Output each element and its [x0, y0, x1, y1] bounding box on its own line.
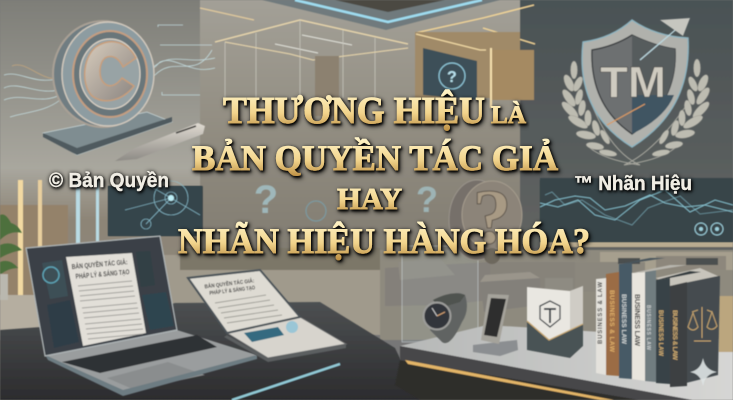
label: copyright: © Bản Quyền [49, 170, 169, 192]
product box with T logo [527, 286, 583, 358]
display shelf [395, 296, 733, 400]
book spine titles [598, 282, 678, 361]
laptop [26, 236, 257, 396]
big metallic question mark coin [449, 173, 522, 264]
title line 4: NHÃN HIỆU HÀNG HÓA? [178, 221, 590, 261]
main title [178, 90, 590, 261]
tablet document title: BẢN QUYỀN TÁC GIẢ: [204, 277, 255, 290]
copyright symbol on glass base [4, 21, 215, 155]
laptop document title [71, 256, 130, 281]
wall screen with network graphic and question marks [108, 178, 438, 236]
arrow rising across shield [607, 18, 690, 125]
title line 1: LÀ [491, 101, 526, 129]
row of law books [596, 258, 720, 387]
title line 2: BẢN QUYỀN TÁC GIẢ [192, 138, 558, 178]
data visualization wall panel right [540, 178, 733, 242]
smartphone on charger [473, 294, 518, 356]
icon: sparkle [690, 358, 717, 386]
shield with TM and laurel wreath [559, 18, 712, 165]
dark desk [0, 302, 420, 400]
background: modern office interior: ? [447, 69, 457, 86]
book spine titles: BUSINESS & LAW [598, 282, 604, 344]
icon: pen [115, 123, 205, 161]
icon: scales of justice [688, 307, 717, 341]
ambient room details [385, 258, 540, 312]
tablet document title [204, 277, 256, 297]
wall screen with network graphic and question marks: ? [254, 178, 278, 222]
big metallic question mark coin: ? [472, 173, 512, 260]
shield with TM and laurel wreath: TM [600, 58, 666, 107]
wave lines around copyright [4, 25, 215, 117]
book spine titles: BUSINESS & LAW [671, 310, 678, 361]
wall screen with network graphic and question marks: ? [416, 179, 438, 220]
label: trademark: ™ Nhãn Hiệu [574, 173, 692, 195]
laptop document title: BẢN QUYỀN TÁC GIẢ: [71, 256, 128, 271]
book spine titles: BUSINESS LAW [620, 294, 627, 345]
icon: plant [0, 214, 22, 300]
laurel wreath [559, 59, 712, 165]
laptop document title: PHÁP LÝ & SÁNG TẠO [75, 267, 130, 281]
foldable tablet [188, 270, 346, 362]
glass display case [402, 246, 478, 342]
tablet document title: PHÁP LÝ & SÁNG TẠO [209, 284, 256, 297]
book spine titles: BUSINESS & LAW [608, 290, 615, 353]
title line 3: HAY [337, 181, 402, 216]
book spine titles: BUSINESS LAW [633, 294, 640, 346]
title line 1: THƯƠNG HIỆU [223, 90, 485, 132]
book spine titles: BUSINESS LAW [645, 305, 651, 350]
smartwatch [424, 293, 467, 343]
book spine titles: BUSINESS LAW [657, 310, 663, 356]
